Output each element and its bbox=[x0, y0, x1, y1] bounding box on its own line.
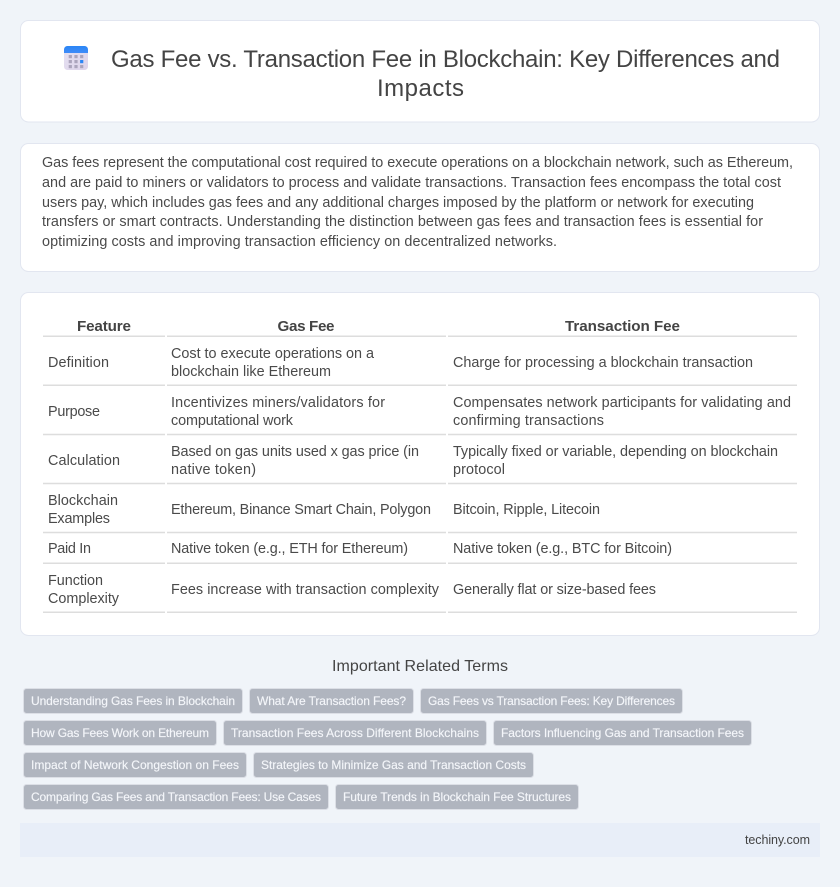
tag bbox=[24, 752, 246, 778]
row: definition bbox=[48, 346, 753, 380]
row: blockchain examples: Bitcoin, Ripple, Litecoin bbox=[453, 502, 600, 518]
title: Impacts bbox=[377, 75, 464, 102]
row: blockchain examples bbox=[48, 493, 600, 527]
row: definition: Definition bbox=[48, 355, 109, 371]
tag bbox=[494, 720, 752, 746]
intro text panel bbox=[20, 144, 820, 272]
row: blockchain examples: Blockchain bbox=[48, 493, 118, 509]
row: purpose bbox=[48, 395, 791, 429]
title bbox=[111, 46, 780, 102]
tag bbox=[336, 784, 578, 810]
row: blockchain examples: Ethereum, Binance Smart Chain, Polygon bbox=[171, 502, 431, 518]
icon: calendar bbox=[64, 46, 88, 70]
row: calculation: Typically fixed or variable, depending on blockchain bbox=[453, 444, 778, 460]
row: paid in: Native token (e.g., ETH for Ethereum) bbox=[171, 541, 408, 557]
comparison table panel bbox=[20, 292, 820, 636]
row: function complexity: Generally flat or size-based fees bbox=[453, 582, 656, 598]
row: paid in bbox=[48, 541, 672, 557]
row: definition: blockchain like Ethereum bbox=[171, 364, 331, 380]
row: definition: Charge for processing a blockchain transaction bbox=[453, 355, 753, 371]
tag: Comparing Gas Fees and Transaction Fees: Use Cases bbox=[31, 790, 321, 804]
row: blockchain examples: Examples bbox=[48, 511, 110, 527]
tag: Impact of Network Congestion on Fees bbox=[31, 758, 239, 772]
row: calculation: protocol bbox=[453, 462, 505, 478]
intro paragraph: and are paid to miners or validators to process and validate transactions. Transaction fees encompass the total cost bbox=[42, 175, 781, 191]
table header: Feature bbox=[77, 318, 131, 335]
related term tags bbox=[24, 688, 752, 810]
table header: Gas Fee bbox=[278, 318, 334, 335]
row: calculation: native token) bbox=[171, 462, 256, 478]
row: calculation bbox=[48, 444, 778, 478]
row: definition: Cost to execute operations on a bbox=[171, 346, 374, 362]
tag bbox=[420, 688, 682, 714]
row: paid in: Native token (e.g., BTC for Bitcoin) bbox=[453, 541, 672, 557]
table header bbox=[77, 318, 680, 335]
tag: Strategies to Minimize Gas and Transaction Costs bbox=[261, 758, 526, 772]
tag bbox=[254, 752, 534, 778]
intro paragraph bbox=[42, 155, 793, 250]
tag bbox=[224, 720, 486, 746]
row: purpose: confirming transactions bbox=[453, 413, 604, 429]
related terms heading: Important Related Terms bbox=[332, 658, 508, 675]
row: function complexity: Function bbox=[48, 573, 103, 589]
tag bbox=[24, 688, 242, 714]
header panel bbox=[20, 20, 820, 122]
intro paragraph: users pay, which includes gas fees and any additional charges imposed by the platform or network for executing bbox=[42, 195, 754, 211]
tag bbox=[250, 688, 414, 714]
intro paragraph: transfers or smart contracts. Understanding the distinction between gas fees and transaction fees is essential for bbox=[42, 214, 763, 230]
row: paid in: Paid In bbox=[48, 541, 91, 557]
footer bar bbox=[20, 823, 820, 857]
intro paragraph: Gas fees represent the computational cost required to execute operations on a blockchain network, such as Ethereum, bbox=[42, 155, 793, 171]
tag bbox=[24, 720, 216, 746]
title: Gas Fee vs. Transaction Fee in Blockchain: Key Differences and bbox=[111, 46, 780, 73]
tag: Future Trends in Blockchain Fee Structures bbox=[343, 790, 571, 804]
tag: Gas Fees vs Transaction Fees: Key Differences bbox=[428, 694, 675, 708]
row: calculation: Based on gas units used x gas price (in bbox=[171, 444, 419, 460]
intro paragraph: optimizing costs and improving transaction efficiency on decentralized networks. bbox=[42, 234, 557, 250]
row: calculation: Calculation bbox=[48, 453, 120, 469]
tag bbox=[24, 784, 328, 810]
row: function complexity: Fees increase with transaction complexity bbox=[171, 582, 440, 598]
tag: What Are Transaction Fees? bbox=[257, 694, 406, 708]
table header: Transaction Fee bbox=[565, 318, 680, 335]
row: function complexity bbox=[48, 573, 656, 607]
row: purpose: Incentivizes miners/validators for bbox=[171, 395, 385, 411]
tag: How Gas Fees Work on Ethereum bbox=[31, 726, 209, 740]
tag: Understanding Gas Fees in Blockchain bbox=[31, 694, 235, 708]
footer bar: techiny.com bbox=[745, 833, 810, 847]
row: purpose: computational work bbox=[171, 413, 294, 429]
row: purpose: Purpose bbox=[48, 404, 100, 420]
tag: Factors Influencing Gas and Transaction Fees bbox=[501, 726, 744, 740]
row: function complexity: Complexity bbox=[48, 591, 120, 607]
row: purpose: Compensates network participants for validating and bbox=[453, 395, 791, 411]
tag: Transaction Fees Across Different Blockchains bbox=[231, 726, 479, 740]
